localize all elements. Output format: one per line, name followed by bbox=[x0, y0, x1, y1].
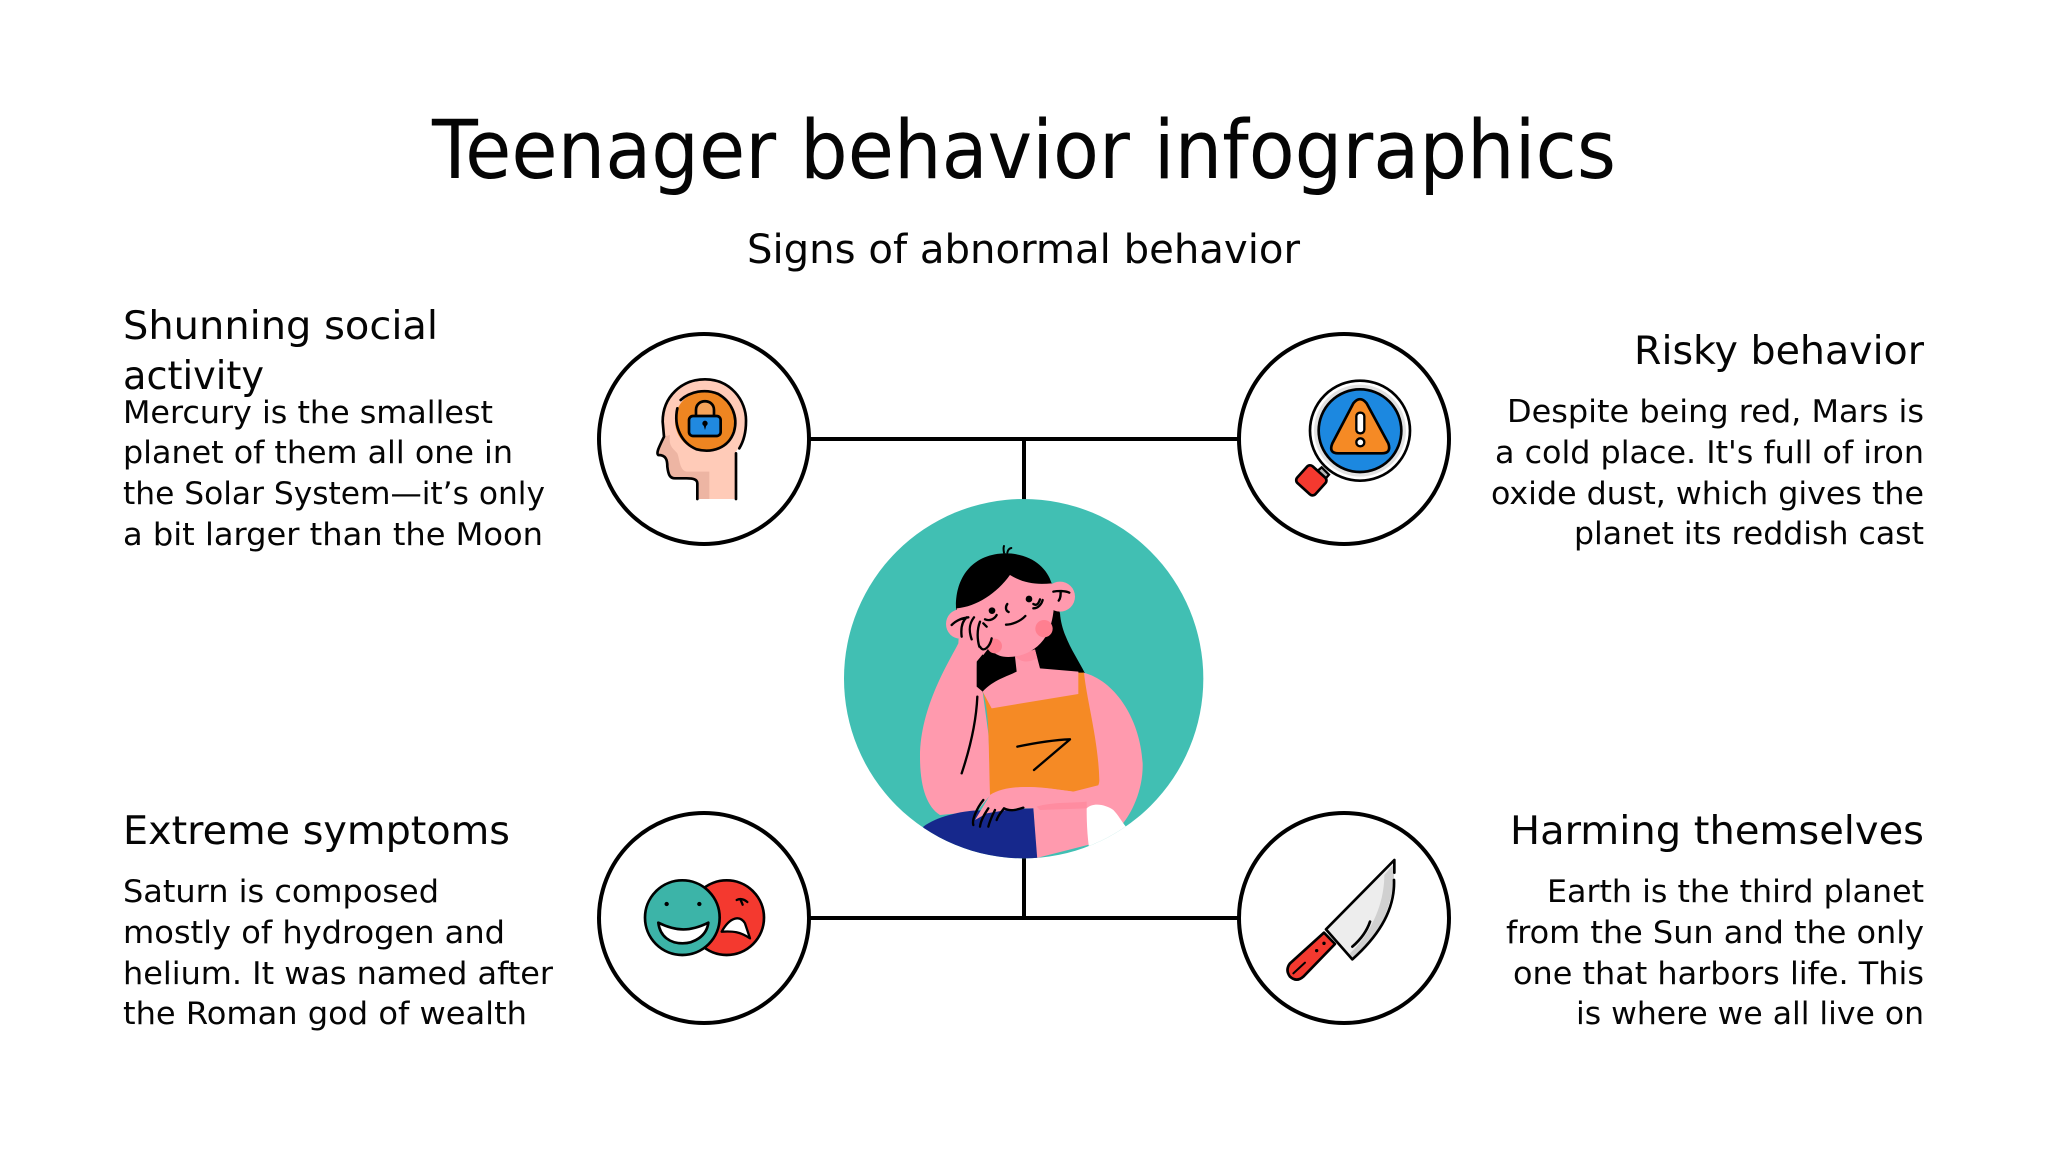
heading: Risky behavior bbox=[1634, 328, 1925, 374]
heading: activity bbox=[123, 353, 264, 399]
body text: mostly of hydrogen and bbox=[123, 915, 505, 951]
title: Teenager behavior infographics bbox=[431, 104, 1616, 198]
panel: shunning social activity bbox=[123, 303, 809, 553]
heading bbox=[123, 303, 438, 399]
subtitle: Signs of abnormal behavior bbox=[747, 227, 1301, 273]
body text: Mercury is the smallest bbox=[123, 395, 493, 431]
body text: the Roman god of wealth bbox=[123, 996, 527, 1032]
body text: Saturn is composed bbox=[123, 874, 439, 910]
panel: harming themselves bbox=[1239, 808, 1924, 1032]
body text bbox=[1506, 874, 1924, 1032]
heading: Extreme symptoms bbox=[123, 808, 510, 854]
heading: Harming themselves bbox=[1510, 808, 1924, 854]
icon: magnifier with warning sign bbox=[1295, 381, 1410, 497]
body text: planet of them all one in bbox=[123, 435, 513, 471]
icon: head with padlock bbox=[657, 379, 746, 499]
icon circle bbox=[1239, 813, 1449, 1023]
body text: a bit larger than the Moon bbox=[123, 517, 543, 553]
body text bbox=[1491, 394, 1924, 552]
icon circle bbox=[599, 813, 809, 1023]
central illustration: thinking teenager bbox=[844, 499, 1203, 863]
icon: happy and sad masks bbox=[645, 880, 764, 955]
icon circle bbox=[599, 334, 809, 544]
body text: the Solar System—it’s only bbox=[123, 476, 545, 512]
body text: a cold place. It's full of iron bbox=[1495, 435, 1924, 471]
body text: from the Sun and the only bbox=[1506, 915, 1924, 951]
body text: Earth is the third planet bbox=[1547, 874, 1924, 910]
body text: one that harbors life. This bbox=[1513, 956, 1924, 992]
body text: Despite being red, Mars is bbox=[1507, 394, 1924, 430]
panel: risky behavior bbox=[1239, 328, 1925, 552]
body text bbox=[123, 395, 545, 553]
body text: planet its reddish cast bbox=[1574, 516, 1924, 552]
body text bbox=[123, 874, 553, 1032]
body text: is where we all live on bbox=[1576, 996, 1924, 1032]
icon circle bbox=[1239, 334, 1449, 544]
infographic canvas bbox=[124, 116, 1924, 1030]
connector lines bbox=[704, 439, 1344, 918]
icon: kitchen knife bbox=[1287, 860, 1394, 980]
body text: oxide dust, which gives the bbox=[1491, 476, 1924, 512]
body text: helium. It was named after bbox=[123, 956, 553, 992]
panel: extreme symptoms bbox=[123, 808, 809, 1032]
heading: Shunning social bbox=[123, 303, 438, 349]
